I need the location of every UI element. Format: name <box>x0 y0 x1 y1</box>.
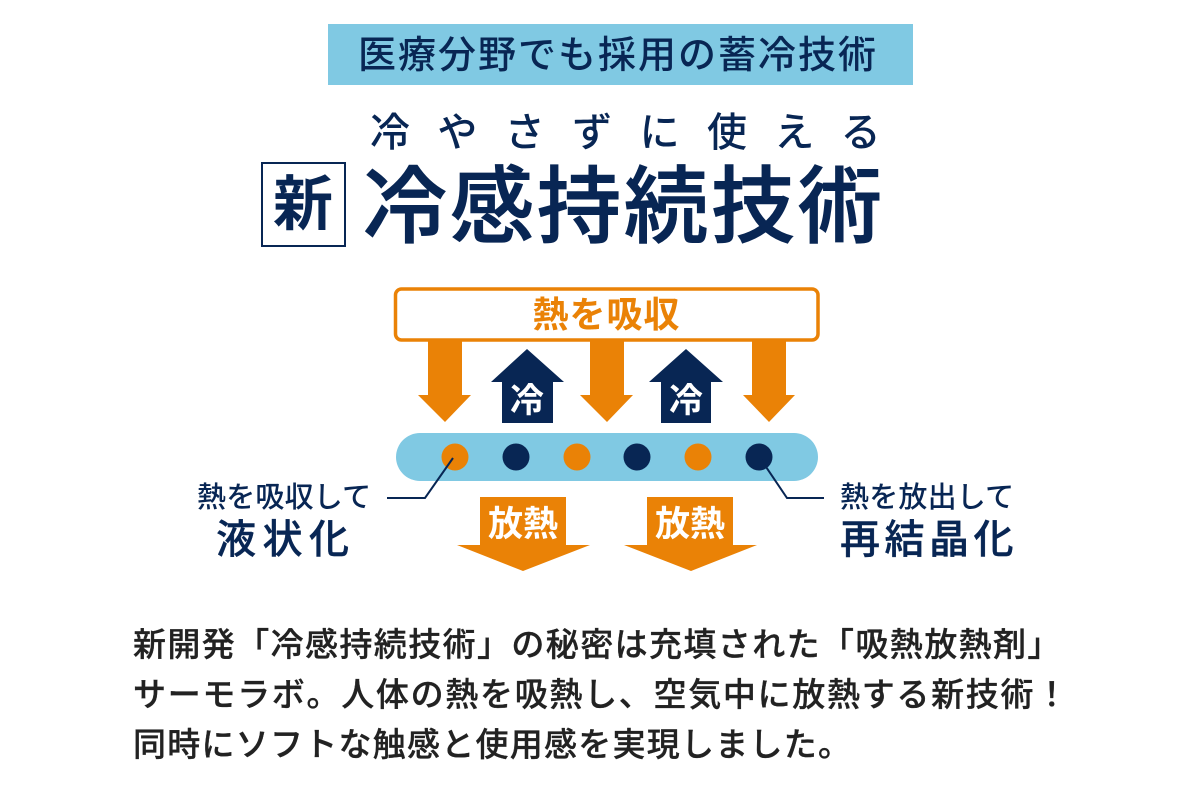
main title: 冷感持続技術 <box>363 160 885 254</box>
arrows: heat release <box>457 497 757 571</box>
right label <box>840 482 1018 562</box>
heat absorption box <box>396 289 818 340</box>
body text <box>133 626 1070 763</box>
arrows: cold up: 冷 <box>669 382 703 420</box>
arrows: heat release: 放熱 <box>655 505 725 544</box>
capsule with particles <box>396 433 818 481</box>
arrows: cold up <box>491 349 723 423</box>
subtitle: 冷やさずに使える <box>370 111 908 155</box>
banner text: 医療分野でも採用の蓄冷技術 <box>358 35 878 77</box>
leader line left <box>387 458 453 498</box>
body text: 同時にソフトな触感と使用感を実現しました。 <box>133 726 852 763</box>
heat absorption box: 熱を吸収 <box>532 294 681 335</box>
right label: 熱を放出して <box>840 482 1014 514</box>
left label <box>197 482 371 562</box>
arrows: cold up: 冷 <box>510 382 544 420</box>
left label: 熱を吸収して <box>197 482 371 514</box>
new badge <box>261 162 346 247</box>
leader line right <box>760 458 824 498</box>
body text: サーモラボ。人体の熱を吸熱し、空気中に放熱する新技術！ <box>133 676 1070 713</box>
arrows: heat down <box>418 340 795 422</box>
arrows: heat release: 放熱 <box>488 505 558 544</box>
new badge text: 新 <box>273 171 333 238</box>
right label: 再結晶化 <box>840 518 1018 562</box>
top banner <box>328 24 913 85</box>
left label: 液状化 <box>216 518 356 562</box>
body text: 新開発「冷感持続技術」の秘密は充填された「吸熱放熱剤」 <box>133 626 1062 663</box>
